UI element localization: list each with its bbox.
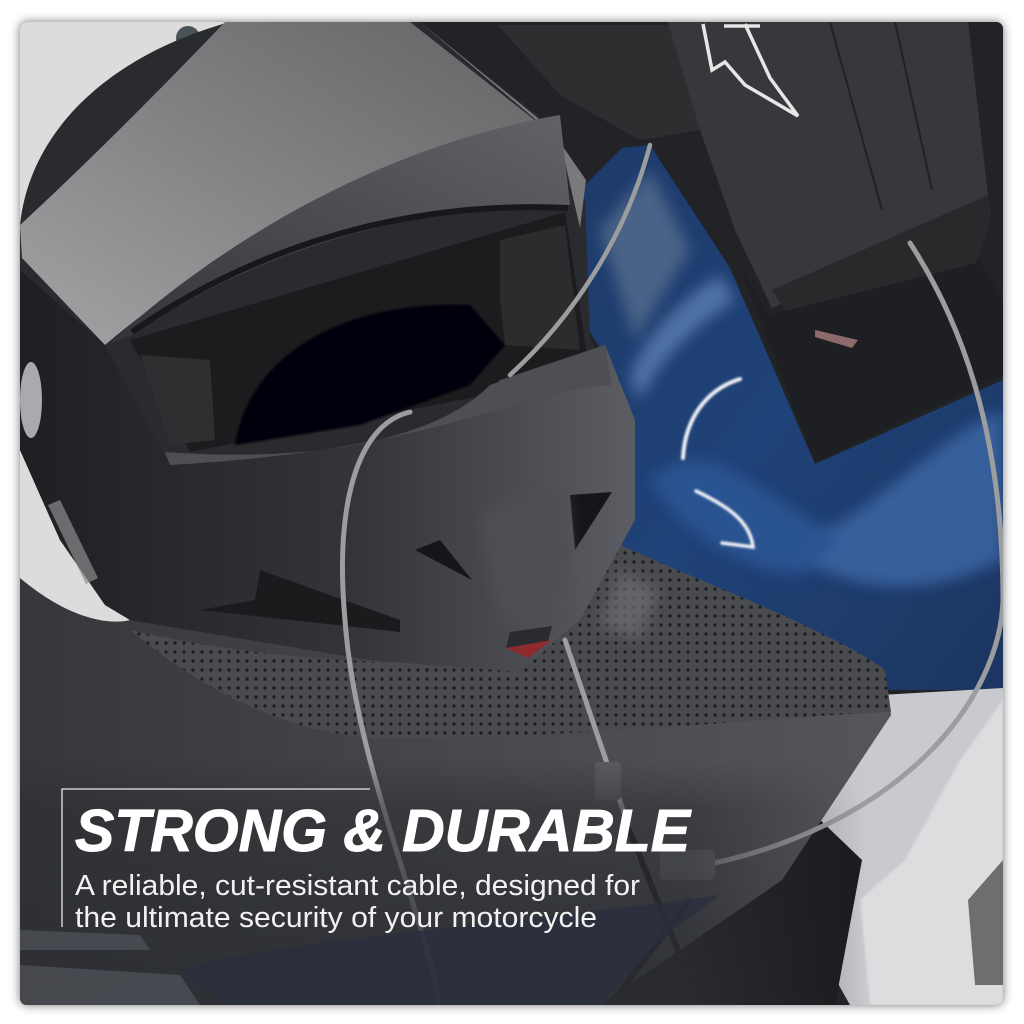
chin bar: [20, 270, 635, 672]
side vent: [200, 570, 400, 632]
jacket sleeve: [668, 22, 990, 308]
seat perforated section: [130, 545, 891, 738]
dark gradient overlay: [20, 766, 856, 1005]
jacket: [430, 22, 1003, 464]
chin vents: [415, 540, 472, 580]
icon: helmet side logo: [48, 500, 98, 584]
helmet interior: [130, 212, 590, 452]
description text: A reliable, cut-resistant cable, designed for: [75, 870, 640, 902]
dark engine area: [600, 815, 862, 1005]
motorcycle tank: [560, 130, 1003, 690]
icon: visor pivot: [20, 362, 42, 438]
cable lock: [595, 762, 715, 1005]
helmet shell: [20, 22, 635, 672]
label: small jacket tag: [815, 330, 858, 348]
icon: safety badge: [506, 626, 552, 658]
description text: [75, 870, 640, 934]
steel cable: [343, 145, 1003, 1005]
silver fairing: [780, 688, 1003, 1005]
icon: wall bolts: [176, 26, 200, 50]
helmet brow: [108, 115, 570, 345]
description text: the ultimate security of your motorcycle: [75, 902, 597, 934]
background: wall: [20, 22, 240, 640]
text frame lines: [62, 789, 370, 927]
tank highlights: [683, 379, 753, 547]
icon: jacket logo: [703, 24, 798, 116]
visor: [20, 22, 545, 345]
title: STRONG & DURABLE: [75, 798, 692, 864]
helmet: [20, 22, 635, 672]
seat: [20, 500, 891, 1005]
